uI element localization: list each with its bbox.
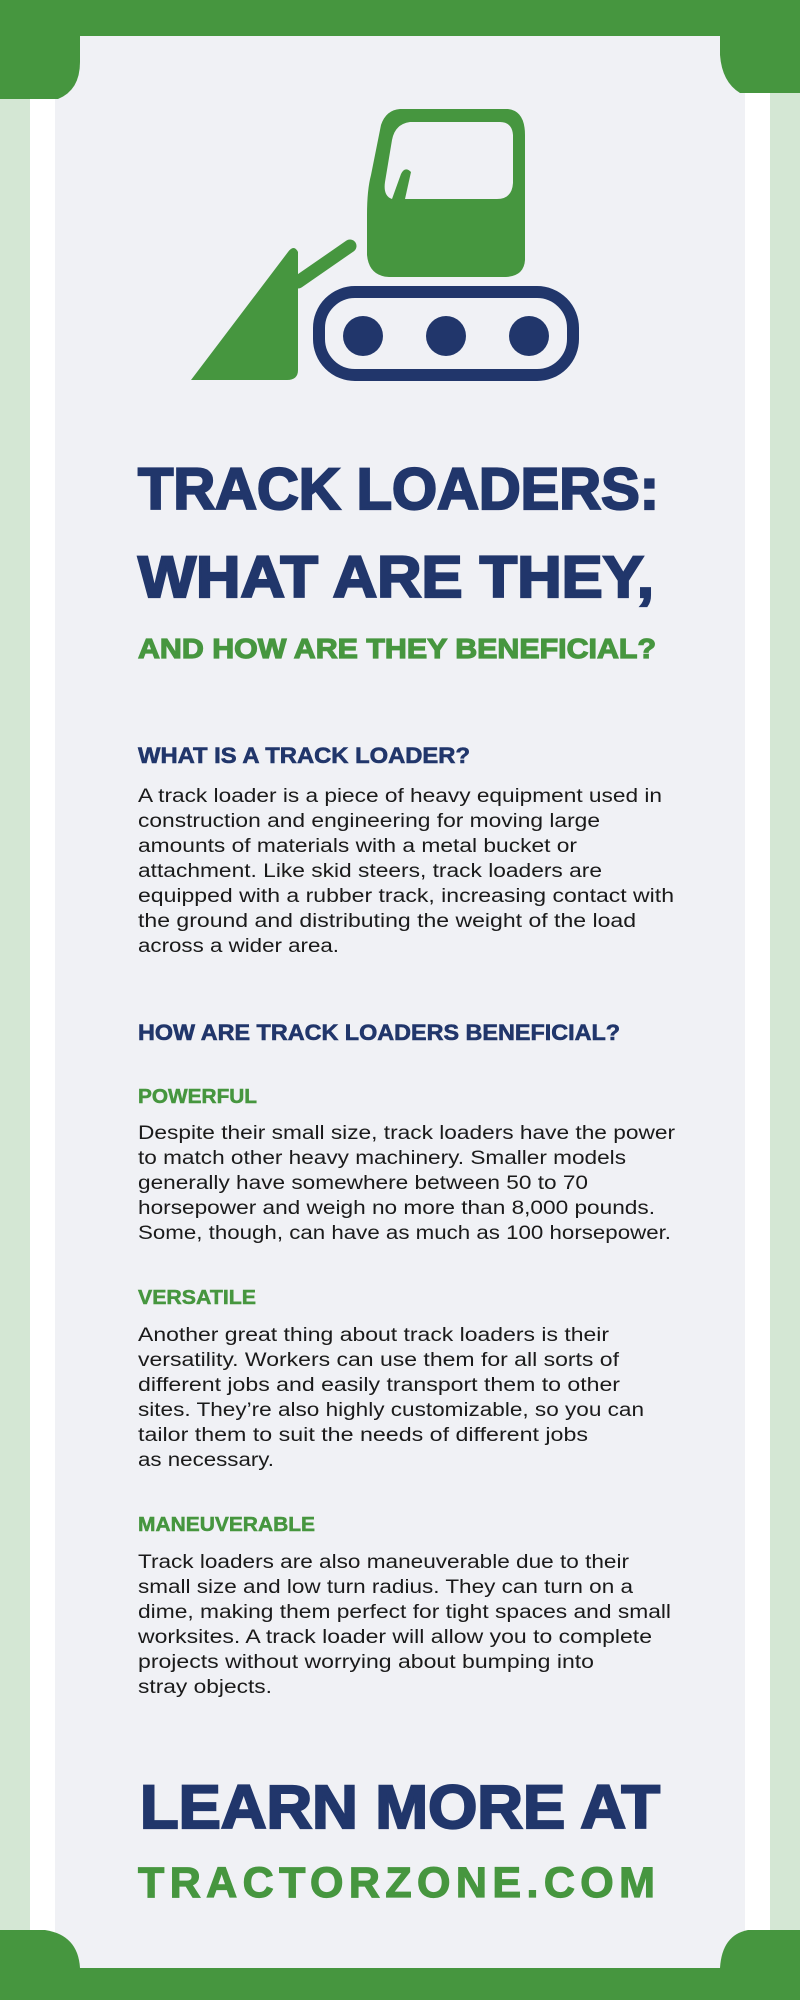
text block: versatile: Another great thing about track loaders is their: [138, 1325, 610, 1346]
footer: learn more: [138, 1773, 660, 1907]
subheading: maneuverable: MANEUVERABLE: [138, 1514, 315, 1536]
text block: definition: A track loader is a piece of heavy equipment used in: [138, 786, 662, 807]
title: AND HOW ARE THEY BENEFICIAL?: [138, 633, 656, 664]
subheading: versatile: VERSATILE: [138, 1287, 256, 1309]
text block: powerful: generally have somewhere between 50 to 70: [138, 1173, 588, 1194]
text block: versatile: different jobs and easily transport them to other: [138, 1375, 621, 1396]
text block: maneuverable: [137, 1552, 671, 1698]
text block: versatile: tailor them to suit the needs of different jobs: [138, 1425, 588, 1446]
text block: powerful: to match other heavy machinery. Smaller models: [138, 1148, 626, 1169]
frame: bottom green band: [0, 1930, 800, 2000]
text block: definition: construction and engineering for moving large: [138, 811, 600, 832]
heading: what is a track loader: WHAT IS A TRACK LOADER?: [138, 743, 470, 768]
text block: versatile: as necessary.: [138, 1450, 274, 1471]
text block: powerful: [138, 1123, 676, 1244]
text block: versatile: [138, 1325, 644, 1471]
frame: top green band: [0, 0, 800, 99]
text block: maneuverable: worksites. A track loader will allow you to complete: [137, 1627, 652, 1648]
icon: track loader: [191, 109, 573, 380]
footer: learn more: TRACTORZONE.COM: [138, 1859, 655, 1907]
text block: versatile: versatility. Workers can use them for all sorts of: [138, 1350, 620, 1371]
footer: learn more: LEARN MORE AT: [140, 1773, 660, 1841]
text block: versatile: sites. They’re also highly customizable, so you can: [138, 1400, 644, 1421]
text block: maneuverable: projects without worrying about bumping into: [138, 1652, 594, 1673]
text block: powerful: Some, though, can have as much as 100 horsepower.: [138, 1223, 671, 1244]
title: TRACK LOADERS:: [138, 457, 659, 522]
text block: definition: amounts of materials with a metal bucket or: [138, 836, 578, 857]
heading: benefits: HOW ARE TRACK LOADERS BENEFICIAL?: [138, 1020, 620, 1045]
subheading: powerful: POWERFUL: [138, 1086, 257, 1108]
text block: powerful: Despite their small size, track loaders have the power: [138, 1123, 676, 1144]
title: WHAT ARE THEY,: [138, 545, 654, 610]
text block: maneuverable: dime, making them perfect for tight spaces and small: [138, 1602, 671, 1623]
title: [138, 457, 659, 664]
text block: powerful: horsepower and weigh no more than 8,000 pounds.: [138, 1198, 655, 1219]
text block: definition: attachment. Like skid steers, track loaders are: [138, 861, 602, 882]
text block: definition: the ground and distributing the weight of the load: [138, 911, 636, 932]
text block: maneuverable: small size and low turn radius. They can turn on a: [138, 1577, 633, 1598]
text block: definition: [138, 786, 674, 957]
text block: definition: across a wider area.: [138, 936, 339, 957]
text block: definition: equipped with a rubber track, increasing contact with: [138, 886, 674, 907]
text block: maneuverable: Track loaders are also maneuverable due to their: [138, 1552, 630, 1573]
text block: maneuverable: stray objects.: [138, 1677, 272, 1698]
